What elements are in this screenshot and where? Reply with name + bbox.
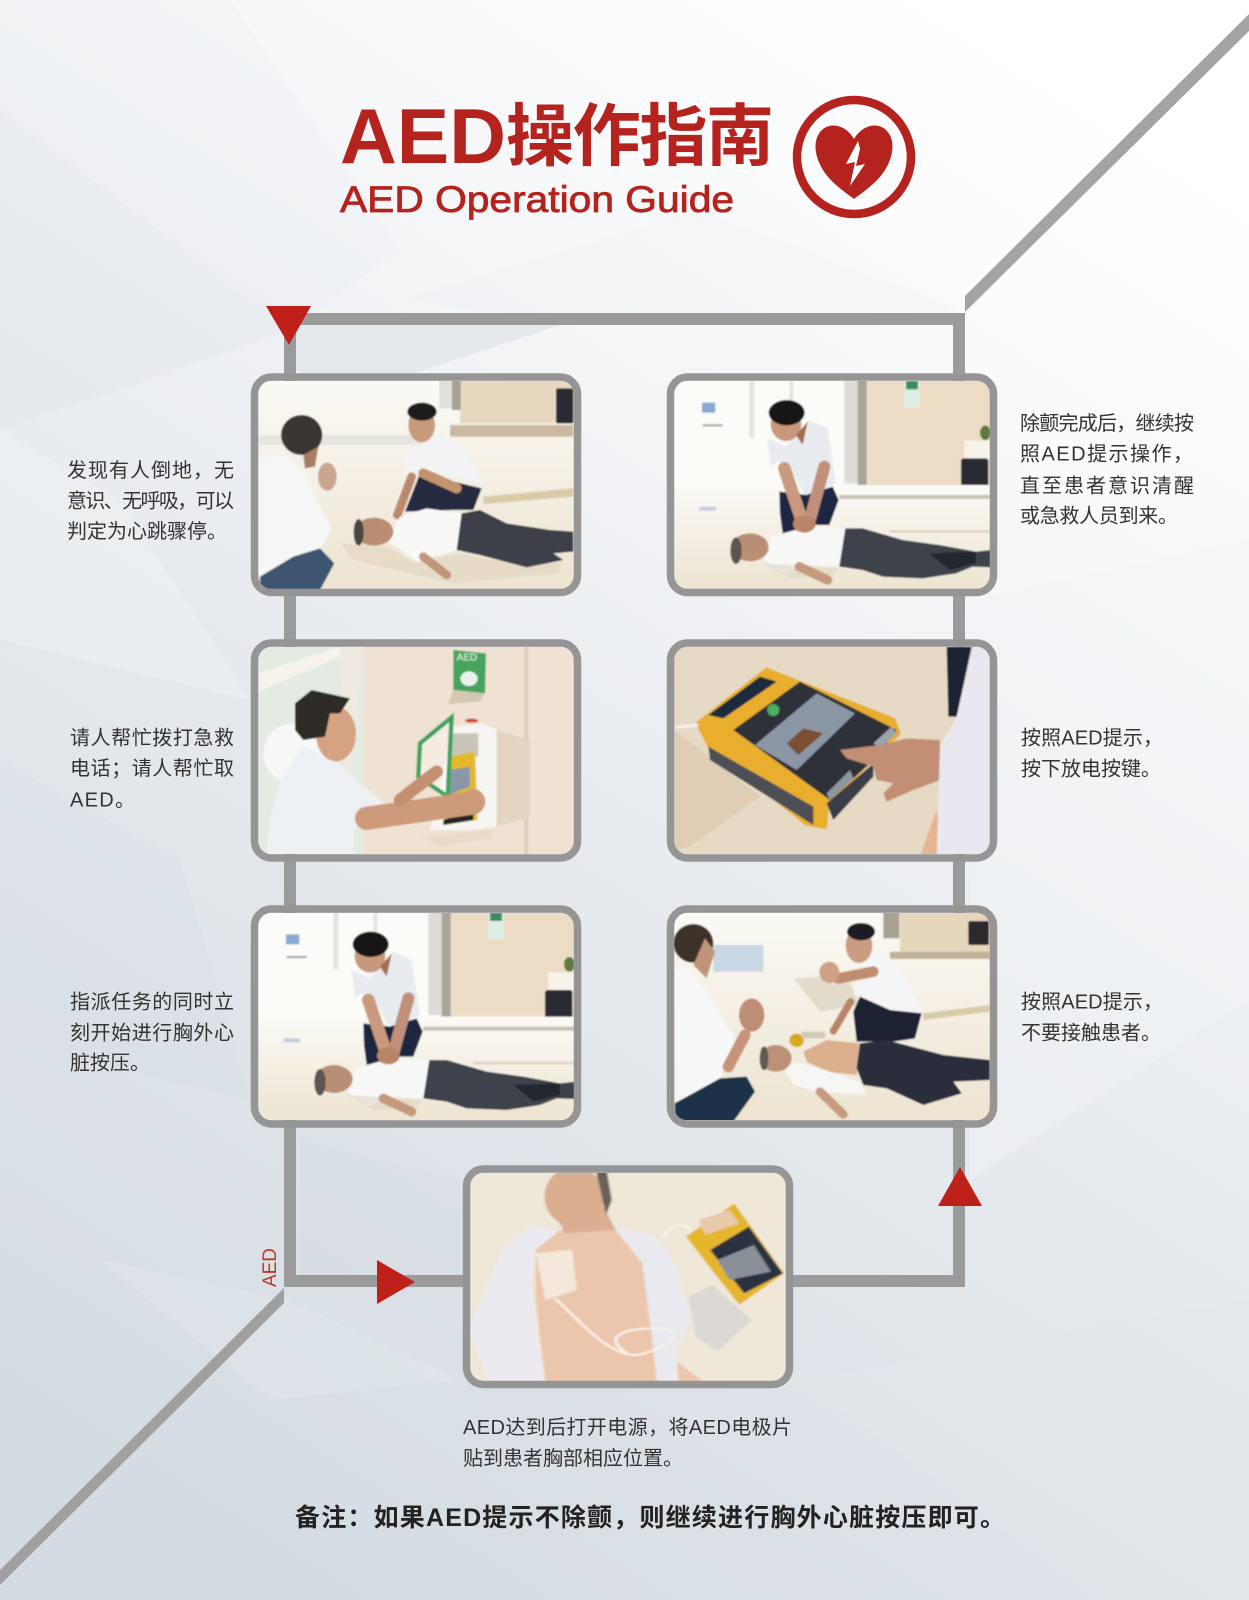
text: step 5: 按照AED提示， (1021, 990, 1163, 1014)
text: step 4: AED达到后打开电源，将AED电极片 (463, 1416, 792, 1439)
text: step 6 (1021, 726, 1163, 780)
title: AED (340, 92, 506, 180)
text: step 3: 指派任务的同时立 (70, 990, 234, 1014)
text: step 1: 发现有人倒地，无 (67, 459, 234, 482)
text: step 5: 不要接触患者。 (1021, 1022, 1161, 1044)
diagonal line: lower left (0, 1288, 284, 1585)
text: step 1: 判定为心跳骤停。 (67, 520, 227, 543)
label: AED vertical: AED (260, 1248, 281, 1287)
text: step 7: 照AED提示操作， (1020, 442, 1193, 466)
panel: step 6 photo (670, 643, 997, 860)
panel: step 4 photo (463, 1167, 793, 1387)
panel: step 2 photo (253, 643, 580, 860)
text: step 1: 意识、无呼吸，可以 (67, 490, 234, 512)
text: step 2: 电话；请人帮忙取 (70, 757, 234, 780)
diagonal line: upper right (965, 14, 1249, 312)
subtitle: AED Operation Guide (340, 179, 734, 220)
panel: step 5 photo (670, 908, 997, 1125)
text: step 5 (1021, 990, 1163, 1044)
text: step 2: AED。 (70, 790, 135, 812)
text: step 2: 请人帮忙拨打急救 (70, 726, 234, 750)
note: 备注：如果AED提示不除颤，则继续进行胸外心脏按压即可。 (295, 1503, 1005, 1532)
text: step 4: 贴到患者胸部相应位置。 (463, 1447, 683, 1470)
panel: step 7 photo (666, 373, 998, 596)
text: step 6: 按照AED提示， (1021, 726, 1163, 750)
text: step 7 (1020, 412, 1194, 528)
text: step 7: 直至患者意识清醒 (1020, 474, 1194, 498)
arrow: up (938, 1167, 982, 1206)
arrow: start triangle (266, 306, 311, 345)
text: step 3: 刻开始进行胸外心 (70, 1022, 234, 1044)
title: 操作指南 (506, 99, 774, 175)
text: step 6: 按下放电按键。 (1021, 758, 1161, 780)
text: step 4 (463, 1416, 792, 1470)
title (340, 92, 774, 180)
text: step 7: 除颤完成后，继续按 (1020, 412, 1194, 435)
text: step 3 (70, 990, 234, 1074)
panel: step 1 photo (253, 377, 580, 593)
panel: step 2 photo: AED (457, 653, 477, 664)
text: step 2 (70, 726, 234, 812)
panel: step 3 photo (250, 905, 582, 1128)
icon: heart with lightning bolt in circle (797, 100, 911, 214)
text: step 3: 脏按压。 (70, 1052, 150, 1074)
arrow: right (377, 1260, 415, 1304)
text: step 7: 或急救人员到来。 (1020, 504, 1178, 528)
text: step 1 (67, 459, 234, 543)
flow line connecting steps (290, 319, 959, 1281)
